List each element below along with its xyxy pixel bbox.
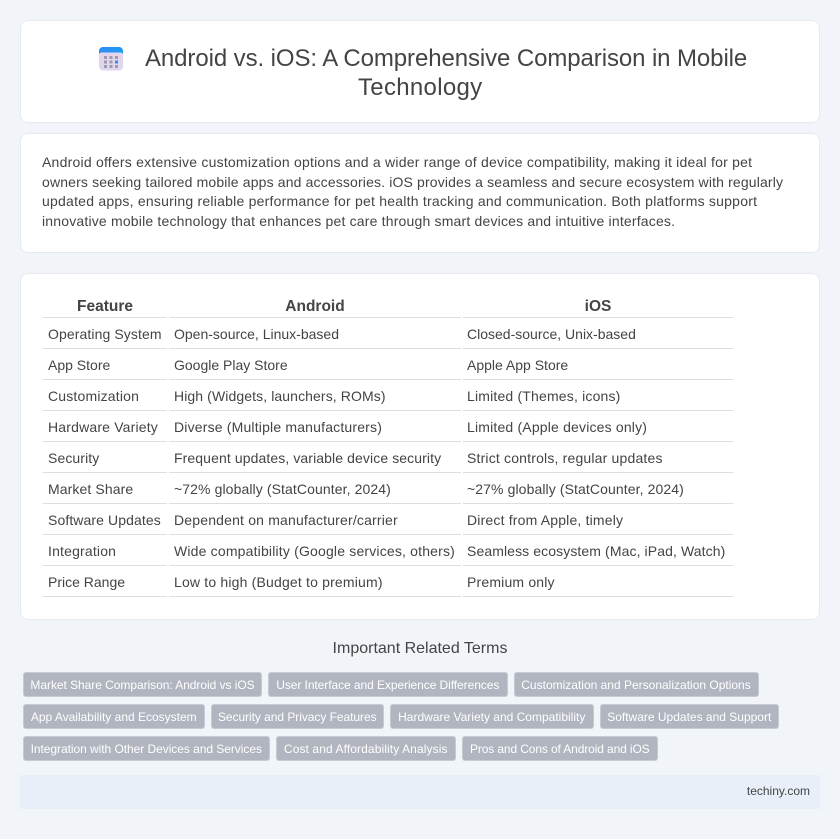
comparison table: Limited (Themes, icons) xyxy=(467,388,621,404)
comparison table: Closed-source, Unix-based xyxy=(467,326,636,342)
tags: related terms: Integration with Other Devices and Services xyxy=(31,742,262,756)
heading: related terms: Important Related Terms xyxy=(333,640,507,657)
tags: related terms: User Interface and Experience Differences xyxy=(276,678,499,692)
tags: related terms xyxy=(23,672,779,761)
comparison table: Price Range xyxy=(48,574,125,590)
comparison table: Market Share xyxy=(48,481,133,497)
tags: related terms: Security and Privacy Features xyxy=(218,710,377,724)
panel: title card xyxy=(20,20,820,123)
comparison table: Hardware Variety xyxy=(48,419,158,435)
footer: source: techiny.com xyxy=(747,784,810,798)
comparison table: Android xyxy=(285,298,345,315)
comparison table: Wide compatibility (Google services, others) xyxy=(174,543,455,559)
comparison table: Low to high (Budget to premium) xyxy=(174,574,383,590)
text block: intro: Android offers extensive customization options and a wider range of device compatibility, making it ideal for pet xyxy=(42,154,752,170)
icon: calendar app xyxy=(99,47,123,70)
comparison table: Premium only xyxy=(467,574,555,590)
tags: related terms: Customization and Personalization Options xyxy=(521,678,751,692)
tags: related terms: Hardware Variety and Compatibility xyxy=(398,710,585,724)
text block: intro: updated apps, ensuring reliable performance for pet health tracking and communication. Both platforms support xyxy=(42,193,757,209)
comparison table: Diverse (Multiple manufacturers) xyxy=(174,419,382,435)
panel: comparison table card xyxy=(20,273,820,620)
comparison table: Strict controls, regular updates xyxy=(467,450,663,466)
title: Technology xyxy=(358,74,482,101)
title: Android vs. iOS: A Comprehensive Comparison in Mobile xyxy=(145,45,747,72)
comparison table: Limited (Apple devices only) xyxy=(467,419,647,435)
comparison table: Feature xyxy=(77,298,133,315)
tags: related terms: App Availability and Ecosystem xyxy=(31,710,197,724)
comparison table: Integration xyxy=(48,543,116,559)
comparison table: Seamless ecosystem (Mac, iPad, Watch) xyxy=(467,543,725,559)
title xyxy=(145,45,747,101)
comparison table: ~72% globally (StatCounter, 2024) xyxy=(174,481,391,497)
text block: intro: innovative mobile technology that enhances pet care through smart devices and intuitive interfaces. xyxy=(42,213,675,229)
comparison table: Apple App Store xyxy=(467,357,568,373)
tags: related terms: Software Updates and Support xyxy=(607,710,771,724)
comparison table: Security xyxy=(48,450,99,466)
comparison table: ~27% globally (StatCounter, 2024) xyxy=(467,481,684,497)
comparison table: Software Updates xyxy=(48,512,161,528)
tags: related terms: Cost and Affordability Analysis xyxy=(284,742,448,756)
comparison table: Dependent on manufacturer/carrier xyxy=(174,512,398,528)
comparison table xyxy=(43,298,733,597)
comparison table: Google Play Store xyxy=(174,357,288,373)
comparison table: App Store xyxy=(48,357,110,373)
panel: intro card xyxy=(20,133,820,253)
comparison table: Frequent updates, variable device security xyxy=(174,450,441,466)
text block: intro xyxy=(42,154,783,229)
text block: intro: owners seeking tailored mobile apps and accessories. iOS provides a seamless and secure ecosystem with regularly xyxy=(42,174,783,190)
comparison table: High (Widgets, launchers, ROMs) xyxy=(174,388,386,404)
comparison table: Operating System xyxy=(48,326,162,342)
footer bar xyxy=(20,775,820,809)
comparison table: Direct from Apple, timely xyxy=(467,512,623,528)
comparison table: Customization xyxy=(48,388,139,404)
comparison table: Open-source, Linux-based xyxy=(174,326,339,342)
comparison table: iOS xyxy=(585,298,611,315)
tags: related terms: Market Share Comparison: Android vs iOS xyxy=(30,678,255,692)
tags: related terms: Pros and Cons of Android and iOS xyxy=(470,742,650,756)
